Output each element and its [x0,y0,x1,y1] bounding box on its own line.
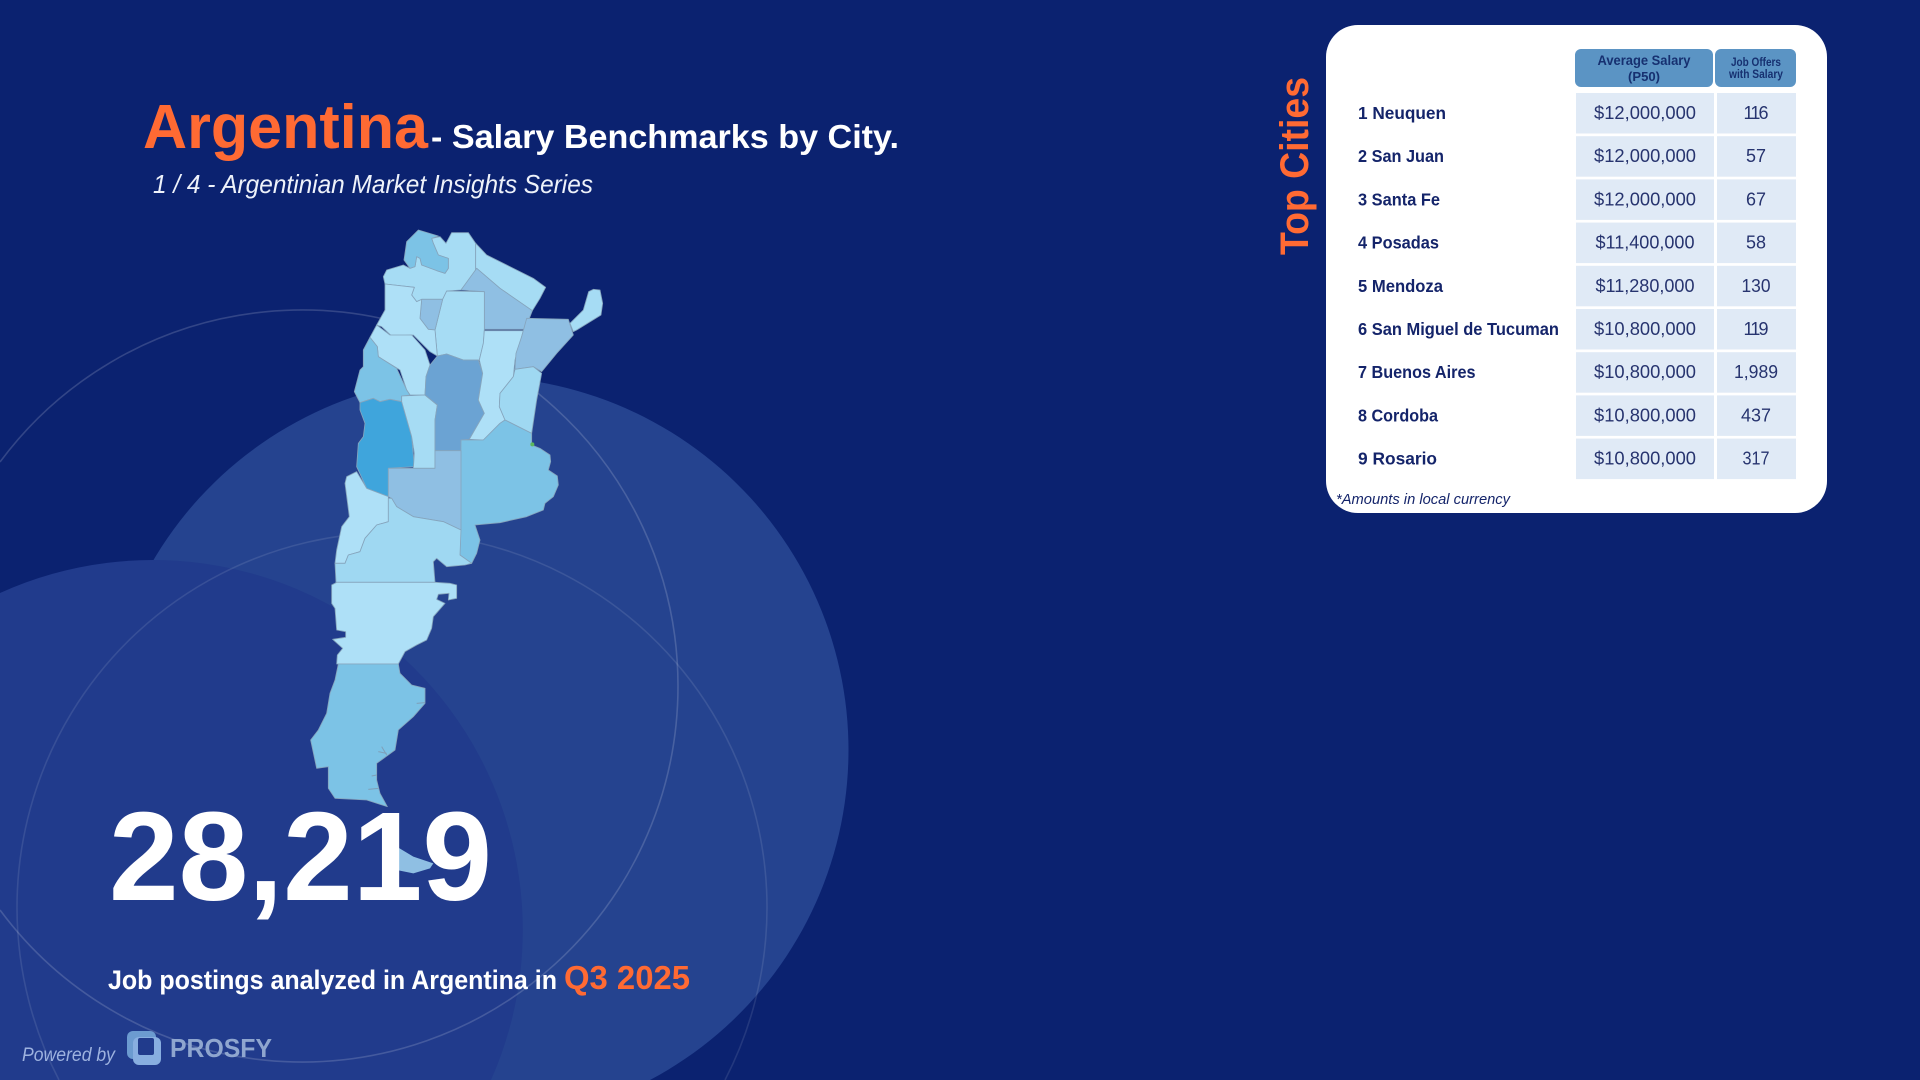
province: Catamarca [377,284,437,356]
province: San Juan [354,337,410,403]
province: Santa Cruz [311,664,425,807]
row 2 [1358,136,1796,177]
row 8 [1358,395,1796,436]
row 9: 9 Rosario [1358,449,1437,469]
province: Tierra del Fuego [397,847,433,873]
row 4: 4 Posadas [1358,233,1439,253]
table header: job offers: with Salary [1728,69,1784,81]
logo: Prosfy [127,1031,272,1065]
province: Cordoba [425,354,484,451]
row 3: $12,000,000 [1594,189,1696,209]
row 5: 5 Mendoza [1358,276,1443,296]
province: Tucuman [420,299,443,330]
row 6: $10,800,000 [1594,319,1696,339]
row 1 [1358,93,1796,134]
province: Salta [383,233,476,302]
province: Rio Negro [335,498,472,582]
table header: job offers: Job Offers [1731,57,1781,69]
big number: 28,219 [109,786,492,927]
province: La Rioja [370,325,430,395]
row 3: 67 [1746,189,1766,209]
row 7: 1,989 [1734,362,1778,382]
table header: job offers [1715,49,1796,87]
row 5: 130 [1742,276,1770,296]
province: Misiones [570,289,603,332]
logo: Prosfy: PROSFY [170,1033,272,1063]
province: Santa Fe [469,331,523,440]
row 7: 7 Buenos Aires [1358,362,1476,382]
province: Corrientes [515,318,573,372]
Buenos Aires city marker [530,442,534,446]
province: Buenos Aires [460,420,558,563]
province: Formosa [476,243,546,311]
row 1: $12,000,000 [1594,103,1696,123]
stat caption: Q3 2025 [564,959,690,996]
title: Argentina [143,93,429,162]
row 2: 57 [1746,146,1766,166]
background circles [0,310,849,1080]
province: La Pampa [388,451,461,530]
row 6 [1358,309,1796,350]
title: - Salary Benchmarks by City. [431,118,899,155]
row 6: 6 San Miguel de Tucuman [1358,319,1559,339]
row 5 [1358,266,1796,306]
row 6: 119 [1744,319,1768,339]
row 2: 2 San Juan [1358,146,1444,166]
table header: average salary: (P50) [1628,69,1660,84]
row 1: 116 [1744,103,1768,123]
row 9: $10,800,000 [1594,449,1696,469]
row 3: 3 Santa Fe [1358,189,1440,209]
heading: Top Cities: Top Cities [1273,77,1317,255]
panel: top cities table [1326,25,1827,513]
province: Mendoza [357,398,414,497]
row 8: $10,800,000 [1594,405,1696,425]
province: Neuquen [335,472,388,563]
row 9: 317 [1742,449,1770,469]
map of Argentina [311,230,603,873]
province: San Luis [402,395,437,468]
row 8: 437 [1741,405,1771,425]
row 4 [1358,223,1796,263]
row 1: 1 Neuquen [1358,103,1446,123]
stat caption [108,959,690,996]
row 7: $10,800,000 [1594,362,1696,382]
province: Santiago del Estero [435,291,484,360]
province: Jujuy [404,230,448,273]
table header: average salary [1575,49,1713,87]
row 3 [1358,179,1796,220]
powered by: Powered by [22,1045,116,1066]
province: Entre Rios [499,367,542,433]
subtitle: 1 / 4 - Argentinian Market Insights Series [153,169,593,199]
row 9 [1358,439,1796,479]
footnote: *Amounts in local currency [1336,492,1511,508]
row 8: 8 Cordoba [1358,405,1438,425]
title [143,93,899,162]
row 4: $11,400,000 [1596,233,1694,253]
stat caption: Job postings analyzed in Argentina in [108,965,557,995]
row 2: $12,000,000 [1594,146,1696,166]
table header: average salary: Average Salary [1598,52,1691,68]
row 5: $11,280,000 [1596,276,1694,296]
province: Chaco [461,268,532,329]
row 4: 58 [1746,233,1766,253]
row 7 [1358,352,1796,393]
province: Chubut [332,582,457,664]
